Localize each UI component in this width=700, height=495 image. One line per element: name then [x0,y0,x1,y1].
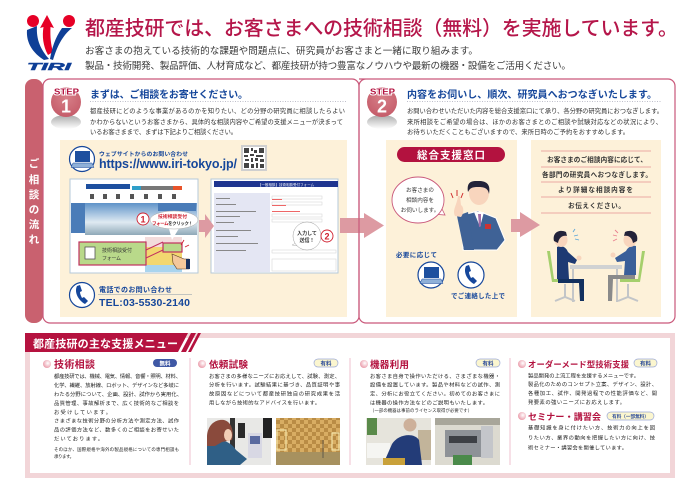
panel: consultation flow tab: 相 [29,173,39,186]
person: researcher [608,231,637,301]
icon: laptop [70,146,94,172]
icon: phone [70,282,94,308]
step 2 body: お待ちいただくこともございますので、来所日時のご予約をおすすめします。 [407,127,629,136]
web inquiry [99,150,238,171]
speech bubble [392,177,445,223]
speech bubble 1 [137,211,198,240]
support desk label: 総合支援窓口 [417,148,485,162]
speech bubble 1: 技術相談受付 [158,213,187,220]
menu: technical consultation: 品の評価方法など、数多くのご相談をお寄せいた [54,426,179,434]
phone inquiry: 電話でのお問い合わせ [99,285,172,294]
menu: custom technical support: オーダーメード型技術支援 [528,360,630,370]
badge: paid [314,359,338,368]
panel: consultation flow tab: ご [29,157,40,170]
panel: consultation flow tab: の [29,204,39,216]
intro text [85,45,571,72]
panel: consultation flow tab [25,79,43,323]
menu: commissioned testing: 依頼試験 [209,359,248,371]
menu: equipment use: （一部の機器は事前のライセンス取得が必要です） [370,407,472,414]
menu: seminars and workshops: セミナー・講習会 [528,411,601,422]
step 1 badge [51,86,81,129]
menu: custom technical support: 発要素の強いニーズにお応えします。 [528,398,625,406]
badge: paid: 有料 [320,360,332,368]
menu: technical consultation: だいております。 [54,436,103,442]
text: as needed: 必要に応じて [396,250,437,259]
logo: TIRI: TIRI [27,61,73,73]
panel: consultation flow tab: れ [29,234,40,246]
website screenshot [70,179,198,273]
menu header band [25,333,201,352]
menu: technical consultation: 技術相談 [54,358,95,371]
step 2 heading: 内容をお伺いし、順次、研究員へおつなぎいたします。 [407,88,657,101]
menu: technical consultation: 都産技研では、機械、電気、情報、音響・照明、材料、 [54,372,181,380]
speech bubble: お客さまの [406,186,434,194]
phone inquiry [98,285,192,309]
phone inquiry: TEL:03-5530-2140 [99,297,190,309]
menu: equipment use: お客さま自身で操作いただける、さまざまな機器・ [370,372,500,380]
menu: equipment use: 定、分析にお役立てください。初めてのお客さまに [370,390,500,398]
speech bubble 2: 2 [324,232,330,242]
menu: commissioned testing: お客さまの多様なニーズにお応えして、試験、測定、 [209,372,340,380]
arrow: desk to researcher [511,212,540,237]
step 1 body: いるお客さままで、まずは下記よりご相談ください。 [90,127,237,136]
support desk label [397,147,505,162]
speech bubble 1: 1 [140,214,146,224]
speech bubble 1: フォームをクリック！ [152,220,193,227]
menu: equipment use [360,359,500,465]
menu: commissioned testing [198,359,341,465]
speech bubble 2: 入力して [297,230,317,237]
researcher text [542,155,652,210]
title: 都産技研では、お客さまへの技術相談（無料）を実施しています。 [85,17,678,40]
web inquiry: https://www.iri-tokyo.jp/ [99,157,238,171]
icon: laptop [418,262,444,288]
arrow: step 1 to step 2 [340,213,384,238]
logo: TIRI [27,15,75,73]
step 2 body: お問い合わせいただいた内容を総合支援窓口にて承り、各分野の研究員におつなぎします。 [407,106,663,115]
QR code [241,145,267,171]
web form callout [79,242,182,265]
web form callout: フォーム [102,256,121,262]
menu header band: 都産技研の主な支援メニュー [33,336,178,350]
step 2 badge: 2 [377,96,387,116]
menu: technical consultation: 化学、繊維、放射線、ロボット、デザインなど多岐に [54,381,179,389]
step 1 badge: 1 [61,96,71,116]
menu: technical consultation: さまざまな技術分野の分析方法や測定方法、試作 [54,416,180,424]
menu: seminars and workshops: りたい方、業界の動向を把握したい方に向け、技 [528,434,656,442]
panel: consultation flow tab: 流 [29,218,40,231]
panel: consultation flow tab: 談 [29,188,40,201]
researcher text: 各部門の研究員へおつなぎします。 [542,170,652,179]
researcher text: より詳細な相談内容を [558,185,633,194]
menu: seminars and workshops: 基礎知識を身に付けたい方、技術力の向上を図 [528,424,655,432]
speech bubble 2 [292,222,333,250]
photo: large machine [435,418,500,465]
step 1 body: 都産技研にどのような事業があるのかを知りたい、どの分野の研究員に相談したらよい [90,106,345,115]
badge: paid, partly free: 有料（一部無料） [612,413,649,420]
menu: technical consultation: 承ります。 [54,453,74,460]
speech bubble 2: 送信！ [299,237,315,244]
badge: paid: 有料 [640,360,651,368]
menu: commissioned testing: 分析を行います。試験結果に基づき、品質証明や事 [209,380,341,388]
icon: phone [458,262,484,288]
menu: commissioned testing: 用しながら技術的なアドバイスを行います。 [209,398,320,406]
menu: custom technical support: 製品開発の上流工程を支援するメニューです。 [528,372,639,380]
form screenshot: 【一般相談】技術相談受付フォーム [258,182,315,187]
researcher text: お客さまのご相談内容に応じて、 [547,155,647,164]
menu: equipment use: 設備を設置しています。製品や材料などの試作、測 [370,380,500,388]
panel: step 2 [359,79,675,323]
panel: general support desk [386,140,517,317]
badge: paid: 有料 [482,360,494,368]
step 2 body [407,106,663,136]
photo: equipment operator [366,418,431,465]
menu: technical consultation: 品質管理、事故解析まで、広く技術的なご相談を [54,399,179,407]
person: staff [451,181,505,250]
photo: testing operator [207,418,272,465]
arrow: screenshot to form [199,214,214,238]
panel: step 1 [43,79,359,323]
researcher text: お伝えください。 [568,201,625,210]
menu: custom technical support: 各種加工、試作、開発過程での性能評価など、開 [528,389,657,397]
badge: free: 無料 [159,360,171,368]
photo: anechoic chamber [276,418,340,465]
menu: custom technical support: 製品化のためのコンセプト立案、デザイン、設計、 [528,380,657,388]
intro text: 製品・技術開発、製品評価、人材育成など、都産技研が持つ豊富なノウハウや最新の機器・設備をご活用ください。 [85,60,571,72]
speech bubble: お伺いします。 [401,206,439,214]
web form callout: 技術相談受付 [102,247,132,254]
text: after contacting: でご連絡した上で [451,291,506,300]
illustration: meeting [547,229,645,302]
menu: seminars and workshops: 術セミナー・講習会を開催しています。 [528,444,627,452]
panel: support menu [25,333,672,476]
step 2 badge [367,86,397,129]
step 1 contact box [60,140,347,317]
step 1 body [90,106,345,136]
panel: researcher connection [531,140,661,317]
form screenshot [211,179,338,273]
menu: commissioned testing: 故原因などについて都産技研独自の研究成果を活 [209,390,341,398]
menu: seminars and workshops [518,411,656,452]
step 2 badge: STEP [370,86,395,96]
icon: pointing hand [172,240,190,269]
menu: custom technical support [518,359,657,406]
menu: equipment use: 機器利用 [370,359,409,371]
menu: technical consultation: そのほか、国際規格や海外の製品規格についての専門相談も [54,446,179,453]
step 2 body: 来所相談をご希望の場合は、ほかのお客さまとのご相談や試験対応などの状況により、 [407,117,662,126]
step 1 badge: STEP [54,86,79,96]
step 1 body: かわからないというお客さまから、具体的な相談内容やご希望の支援メニューが決まって [90,117,343,126]
menu: technical consultation: わたる分野について、企画、設計、試作から実用化、 [54,390,182,398]
menu: technical consultation: お受けしています。 [54,408,111,416]
web inquiry: ウェブサイトからのお問い合わせ [99,150,188,158]
step 1 heading: まずは、ご相談をお寄せください。 [90,88,248,101]
menu: technical consultation [43,358,182,460]
menu: equipment use: は機器の操作方法などのご説明もいたします。 [370,398,488,406]
person: client [554,231,584,301]
intro text: お客さまの抱えている技術的な課題や問題点に、研究員がお客さまと一緒に取り組みます。 [85,45,478,57]
speech bubble: 相談内容を [406,196,434,204]
